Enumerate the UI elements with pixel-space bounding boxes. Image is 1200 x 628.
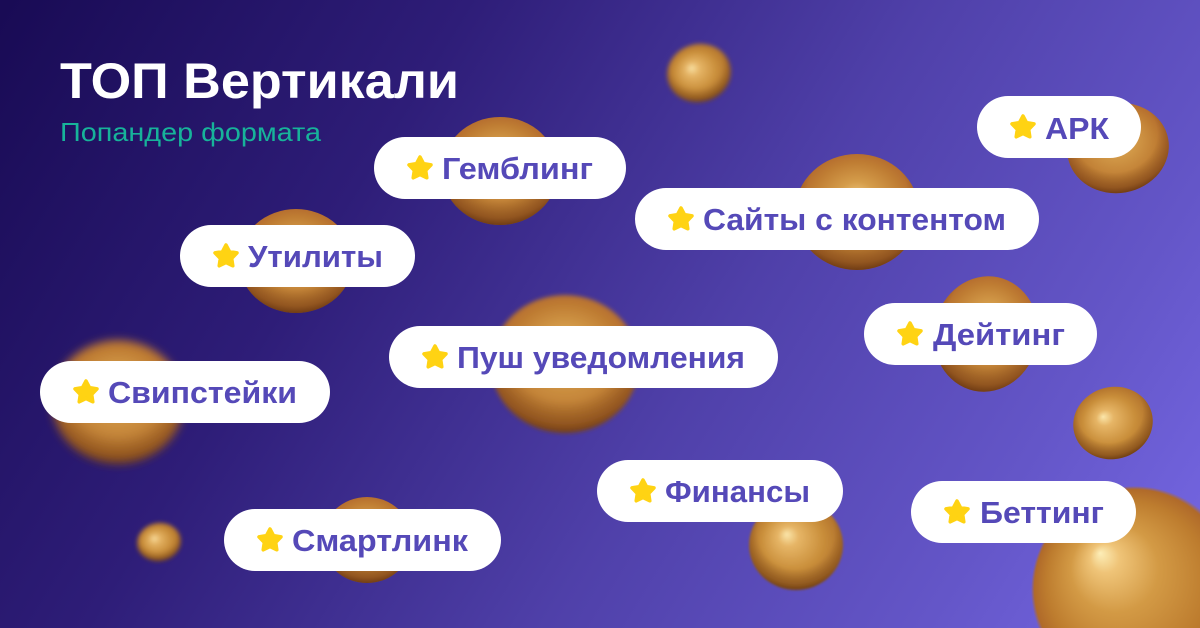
title: ТОП Вертикали [60,53,459,109]
star icon [259,529,281,550]
egg: behind gambling [442,117,558,225]
star icon [75,381,97,402]
label: Гемблинг [442,151,593,186]
pill: sweepstakes [40,361,330,423]
star icon [899,323,921,344]
subtitle: Попандер формата [60,117,322,147]
star icon [215,245,237,266]
egg: behind push [491,295,639,433]
pill: push notifications [389,326,778,388]
label: Свипстейки [108,375,297,410]
pill: smartlink [224,509,501,571]
star icon [670,208,692,229]
label: Смартлинк [292,523,468,558]
egg: behind dating [923,266,1049,402]
label: Пуш уведомления [457,340,745,375]
egg: large bottom right [1031,486,1200,628]
pill: utilities [180,225,415,287]
label: Сайты с контентом [703,202,1006,237]
label: АРК [1045,111,1109,146]
pill: APK [977,96,1141,158]
label: Финансы [665,474,810,509]
pill: gambling [374,137,626,199]
label: Беттинг [980,495,1104,530]
egg: behind sites [795,154,919,270]
pill: content sites [635,188,1039,250]
egg: below finance [749,500,843,590]
pill: finance [597,460,843,522]
pill: dating [864,303,1097,365]
egg: top [661,37,737,109]
pill: betting [911,481,1136,543]
label: Дейтинг [933,317,1065,352]
star icon [1012,116,1034,137]
egg: behind sweepstakes [52,340,184,464]
egg: left small [134,519,184,565]
egg: behind smartlink [322,497,412,583]
star icon [409,157,431,178]
star icon [946,501,968,522]
egg: behind APK [1060,95,1176,201]
egg: behind utilities [239,209,353,313]
star icon [424,346,446,367]
star icon [632,480,654,501]
egg: right small [1065,378,1161,468]
label: Утилиты [248,239,383,274]
